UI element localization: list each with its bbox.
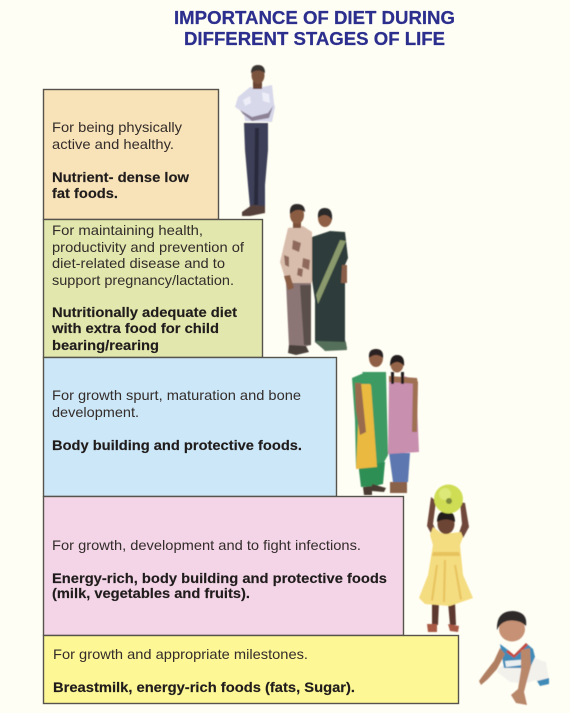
panel: elderly stage: fat foods. [52, 185, 118, 201]
title [174, 7, 455, 49]
icon: crawling baby [479, 611, 549, 705]
panel: adult stage: bearing/rearing [52, 337, 159, 353]
panel: infant stage: For growth and appropriate milestones. [53, 646, 308, 662]
panel: adult stage [44, 220, 262, 358]
title: IMPORTANCE OF DIET DURING [174, 7, 455, 28]
title: DIFFERENT STAGES OF LIFE [184, 28, 445, 49]
panel: infant stage [44, 636, 458, 704]
icon: adult couple [280, 204, 348, 355]
panel: adult stage: with extra food for child [51, 320, 219, 336]
panel: adolescent stage: development. [52, 404, 139, 420]
panel: elderly stage: Nutrient- dense low [52, 169, 189, 185]
panel: elderly stage: active and healthy. [52, 136, 174, 152]
panel: adult stage: diet-related disease and to [52, 255, 225, 271]
panel: elderly stage: For being physically [52, 119, 182, 135]
icon: adolescent girls [352, 349, 419, 495]
panel: child stage: (milk, vegetables and fruits). [52, 585, 250, 601]
icon: child with ball [419, 484, 473, 632]
panel: adolescent stage: For growth spurt, maturation and bone [52, 387, 301, 403]
panel: child stage: Energy-rich, body building and protective foods [52, 570, 387, 586]
panel: adult stage: support pregnancy/lactation. [52, 272, 234, 288]
panel: elderly stage [44, 90, 218, 220]
panel: adolescent stage [44, 358, 336, 496]
panel: child stage: For growth, development and to fight infections. [52, 537, 361, 553]
panel: infant stage: Breastmilk, energy-rich foods (fats, Sugar). [53, 679, 355, 695]
icon: elderly man [235, 65, 275, 216]
panel: child stage [44, 496, 404, 636]
panel: adult stage: Nutritionally adequate diet [52, 304, 237, 320]
panel: adult stage: For maintaining health, [52, 222, 203, 238]
panel: adolescent stage: Body building and protective foods. [52, 437, 302, 453]
panel: adult stage: productivity and prevention of [52, 239, 244, 255]
